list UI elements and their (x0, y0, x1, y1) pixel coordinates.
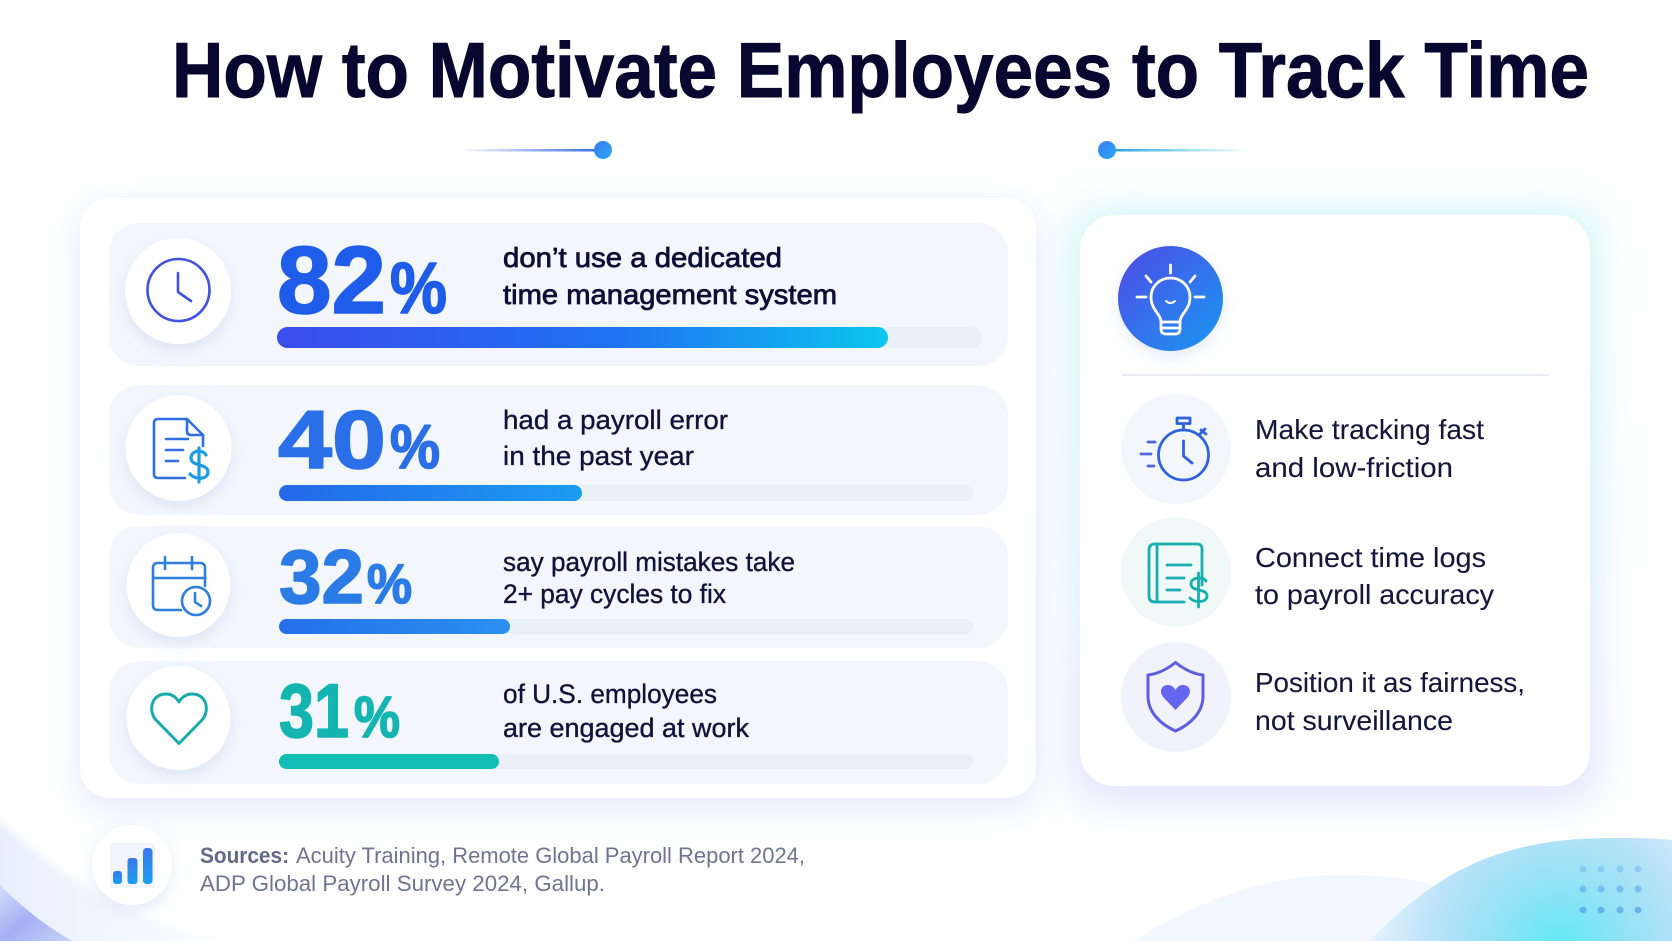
stat description: 2+ pay cycles to fix (503, 579, 726, 609)
stat description: in the past year (503, 441, 694, 471)
panel: statistics (80, 198, 1036, 798)
stat description: don’t use a dedicated (503, 242, 782, 273)
stat number: 32 percent: 32 (279, 535, 364, 620)
stat description (503, 679, 750, 743)
stat number: 31 percent: 31 (279, 669, 349, 754)
icon: clock (148, 259, 210, 321)
recommendation text: not surveillance (1255, 705, 1453, 736)
recommendation text: Make tracking fast (1255, 414, 1484, 445)
icon: stopwatch (1141, 418, 1208, 480)
recommendation: connect to payroll (1121, 517, 1494, 627)
stat number: 31 percent (279, 669, 400, 754)
stat description: are engaged at work (503, 713, 750, 743)
icon: ledger with dollar (1149, 544, 1207, 607)
stat description (503, 242, 837, 310)
stat row: 32% (109, 526, 1008, 648)
recommendation text (1255, 667, 1525, 736)
icon: payroll document (154, 419, 208, 482)
title accent: right dot and line (1098, 141, 1248, 159)
sources text: Acuity Training, Remote Global Payroll Report 2024, (296, 843, 805, 868)
stat number: 40 percent: 40 (278, 393, 386, 486)
sources text: ADP Global Payroll Survey 2024, Gallup. (200, 871, 605, 896)
divider (1122, 374, 1549, 376)
recommendation text (1255, 542, 1494, 610)
progress bar: 82 percent (277, 327, 982, 348)
decorative dot grid (1580, 866, 1642, 914)
title accent: left line and dot (461, 141, 612, 159)
stat number: 32 percent (279, 535, 412, 620)
stat description: time management system (503, 279, 837, 310)
stat number: 82 percent (277, 227, 447, 334)
stat number: 82 percent: % (390, 249, 447, 329)
recommendation text: to payroll accuracy (1255, 579, 1494, 610)
stat number: 40 percent: % (390, 413, 440, 482)
icon: light bulb badge (1118, 246, 1223, 351)
progress bar: 31 percent (279, 754, 973, 769)
stat description: say payroll mistakes take (503, 547, 795, 577)
panel: recommendations (1068, 205, 1602, 805)
recommendation: fast tracking (1121, 394, 1484, 504)
background decoration: bottom waves (0, 815, 1672, 941)
recommendation: fairness (1121, 642, 1525, 752)
progress bar: 40 percent (279, 485, 973, 501)
stat description: had a payroll error (503, 405, 728, 435)
recommendation text (1255, 414, 1484, 483)
progress bar: 32 percent (279, 619, 973, 634)
icon: heart (152, 694, 206, 744)
stat row: 82% (109, 223, 1008, 366)
stat number: 40 percent (278, 393, 440, 486)
icon: calendar with clock (153, 557, 210, 615)
sources text (200, 843, 805, 896)
stat description (503, 405, 728, 471)
recommendation text: Connect time logs (1255, 542, 1486, 573)
recommendation text: and low-friction (1255, 452, 1453, 483)
sources badge: bar chart icon (92, 825, 172, 905)
stat description (503, 547, 795, 609)
stat row: 31% (109, 661, 1008, 784)
stat number: 31 percent: % (354, 685, 400, 750)
stat number: 82 percent: 82 (277, 227, 386, 334)
icon: shield with heart (1148, 662, 1203, 731)
sources text: Sources: (200, 843, 289, 868)
stat number: 32 percent: % (367, 552, 412, 615)
recommendation text: Position it as fairness, (1255, 667, 1525, 698)
stat row: 40% (109, 385, 1008, 515)
stat description: of U.S. employees (503, 679, 717, 709)
